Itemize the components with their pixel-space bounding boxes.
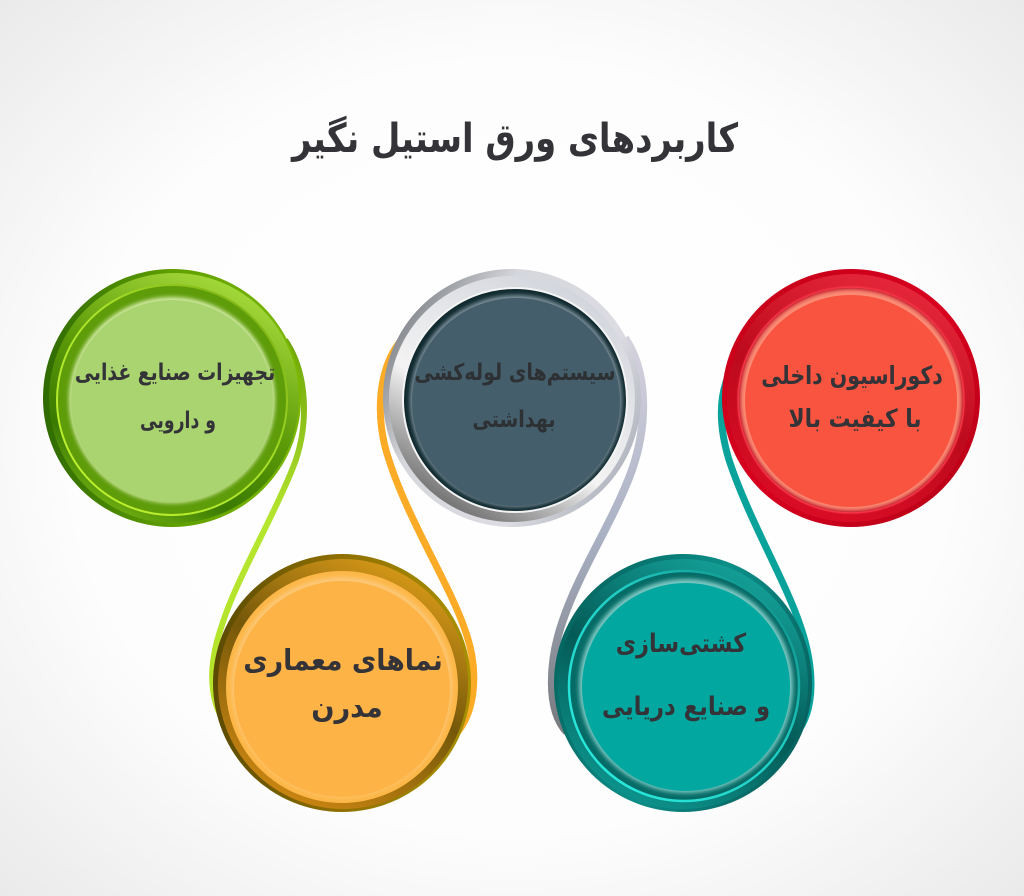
label: تجهیزات صنایع غذایی — [75, 358, 275, 385]
label — [75, 358, 275, 434]
label: کشتی‌سازی — [616, 628, 747, 658]
label: مدرن — [311, 690, 383, 724]
label: و دارویی — [140, 407, 216, 434]
label — [243, 643, 443, 724]
title: کاربردهای ورق استیل نگیر — [290, 115, 738, 162]
ribbon: red to teal — [721, 350, 811, 735]
label — [602, 628, 770, 721]
label: سیستم‌های لوله‌کشی — [415, 358, 615, 385]
ribbon: orange to gray — [380, 335, 474, 735]
ribbon: green to orange — [212, 340, 304, 732]
label: دکوراسیون داخلی — [761, 362, 943, 391]
node: green food and pharma equipment — [43, 269, 301, 527]
label — [761, 362, 943, 433]
label: و صنایع دریایی — [602, 691, 770, 721]
label: با کیفیت بالا — [788, 404, 922, 433]
node: red interior decoration — [722, 269, 980, 527]
node: orange modern facades — [213, 554, 471, 812]
node: gray plumbing systems — [383, 269, 641, 527]
label — [415, 358, 615, 432]
node: teal shipbuilding — [554, 554, 812, 812]
ribbon: gray to teal — [552, 338, 643, 732]
label: بهداشتی — [472, 405, 556, 432]
label: نماهای معماری — [243, 643, 443, 677]
